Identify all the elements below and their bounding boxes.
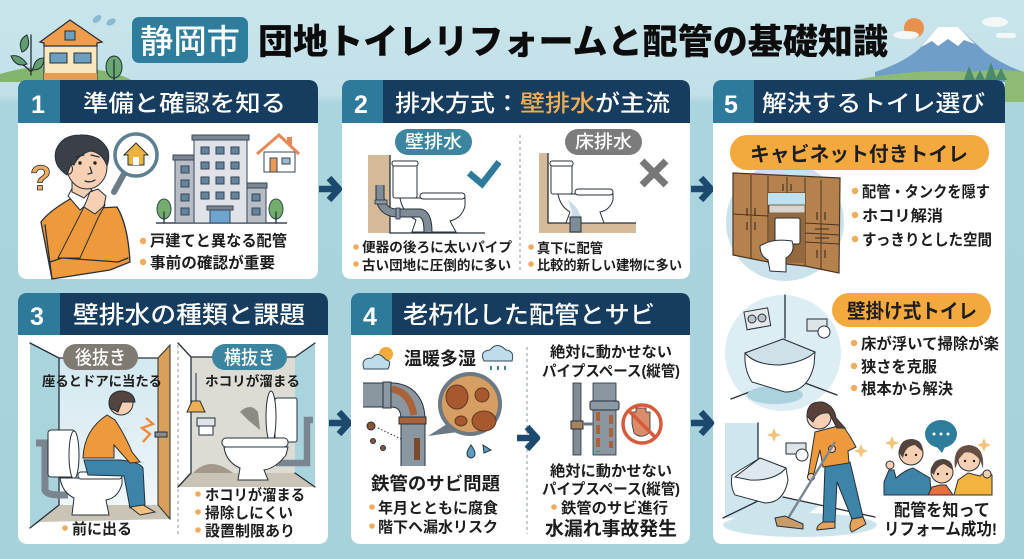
rust bullets: 年月とともに腐食	[378, 499, 498, 517]
wall-hung bullets: 根本から解決	[861, 380, 953, 398]
panel 3 number: 3	[30, 303, 44, 331]
panel 3: 壁排水の種類と課題	[18, 293, 328, 544]
label: pipe space top: 絶対に動かせない	[550, 343, 672, 361]
illustration: vertical pipes	[571, 383, 619, 455]
warning: leak accident: 水漏れ事故発生	[545, 518, 677, 540]
cabinet bullets: ホコリ解消	[862, 207, 943, 225]
panel 1 number: 1	[31, 91, 45, 119]
panel 1 bullets	[140, 231, 287, 272]
floor drain pill	[565, 129, 642, 155]
arrow 2 to 5	[691, 178, 711, 200]
panel 2: 排水方式	[342, 80, 690, 279]
illustration: Mt Fuji and sun	[855, 17, 1024, 102]
panel 2 bullets: 真下に配管	[537, 240, 603, 256]
closing message: リフォーム成功!	[884, 519, 997, 539]
label: dust collects: ホコリが溜まる	[205, 373, 300, 389]
cabinet toilet pill: キャビネット付きトイレ	[750, 143, 968, 166]
illustration: rusty pipe	[363, 382, 426, 466]
panel 1 heading: 準備と確認を知る	[83, 90, 286, 116]
bullet: rust progresses: 鉄管のサビ進行	[561, 499, 668, 517]
arrow 3 to 4	[329, 412, 349, 434]
wall-hung toilet pill	[832, 293, 991, 327]
icon: question mark: ?	[30, 159, 51, 198]
divider	[177, 345, 179, 534]
rust bullets: 階下へ漏水リスク	[378, 519, 498, 536]
pill: 横抜き: 横抜き	[224, 347, 275, 369]
illustration: happy family	[884, 420, 992, 495]
wall-hung bullets	[851, 334, 999, 398]
panel 3 bullets: ホコリが溜まる	[205, 486, 305, 504]
label: pipe space bottom: 絶対に動かせない	[550, 462, 672, 480]
icon: sun and cloud	[363, 347, 393, 369]
title badge: 静岡市: 静岡市	[140, 23, 240, 60]
illustration: cabinet toilet	[726, 163, 844, 281]
illustration: wall-hung toilet in circle	[725, 295, 841, 411]
panel 2 bullets: 古い団地に圧倒的に多い	[362, 257, 511, 273]
panel 1 bullets: 戸建てと異なる配管	[150, 231, 287, 250]
panel 4 heading: 老朽化した配管とサビ	[403, 302, 655, 329]
icon: detached house	[257, 135, 299, 172]
panel 5 heading: 解決するトイレ選び	[762, 90, 985, 116]
label: pipe space bottom: パイプスペース(縦管)	[542, 480, 680, 498]
cabinet bullets: すっきりとした空間	[862, 230, 992, 249]
divider	[519, 135, 521, 272]
divider	[526, 347, 528, 534]
closing message	[884, 500, 997, 539]
panel 2 bullets: 便器の後ろに太いパイプ	[362, 239, 513, 255]
pill: 後抜き: 後抜き	[75, 347, 126, 369]
bullet: 前に出る: 前に出る	[72, 520, 132, 538]
arrow inside panel 4	[517, 427, 537, 449]
label: warm and humid: 温暖多湿	[404, 348, 476, 369]
panel 4: 老朽化した配管とサビ	[351, 293, 690, 544]
scene: rear drain toilet and seated man	[30, 343, 170, 528]
panel 5: 解決するトイレ選び	[713, 80, 1005, 544]
pill: 後抜き	[63, 344, 138, 370]
pill: 横抜き	[212, 344, 287, 370]
panel 5 number: 5	[724, 91, 738, 119]
panel 3 bullets: 設置制限あり	[205, 523, 295, 540]
panel 2 number: 2	[354, 91, 368, 119]
illustration: apartment building	[156, 135, 287, 223]
floor drain pill: 床排水	[575, 132, 632, 152]
scene: side drain toilet	[178, 343, 315, 487]
title: 団地トイレリフォームと配管の基礎知識	[258, 23, 888, 62]
label: pipe space top: パイプスペース(縦管)	[542, 362, 680, 380]
heading: rust problem: 鉄管のサビ問題	[371, 473, 500, 494]
panel 3 bullets	[195, 486, 305, 540]
wall drain pill: 壁排水	[405, 132, 462, 152]
label: pipe space top	[542, 343, 680, 380]
illustration: wall drain toilet	[368, 155, 485, 233]
label: pipe space bottom	[542, 462, 680, 498]
illustration: rust close-up	[428, 374, 500, 458]
cabinet bullets	[852, 182, 992, 249]
icon: do not touch	[623, 405, 661, 443]
panel 3 bullets: 掃除しにくい	[205, 505, 293, 522]
label: door collision: 座るとドアに当たる	[42, 373, 162, 389]
cabinet bullets: 配管・タンクを隠す	[862, 182, 990, 201]
icon: check mark	[469, 162, 499, 184]
panel 1 bullets: 事前の確認が重要	[150, 253, 275, 272]
wall-hung toilet pill: 壁掛け式トイレ	[847, 300, 977, 323]
closing message: 配管を知って	[894, 500, 990, 520]
illustration: floor drain toilet	[539, 153, 636, 233]
panel 1: 準備と確認を知る	[18, 80, 318, 279]
illustration: thinking man	[41, 135, 130, 279]
icon: rain cloud	[482, 346, 513, 370]
arrow 1 to 2	[319, 178, 339, 200]
cabinet toilet pill	[730, 135, 989, 170]
rust bullets	[369, 499, 498, 536]
panel 2 bullets	[353, 239, 682, 273]
panel 2 heading: 排水方式： 壁排水 が主流	[395, 90, 670, 116]
title badge: 静岡市	[132, 17, 248, 63]
panel 4 number: 4	[363, 303, 377, 331]
panel 2 bullets: 比較的新しい建物に多い	[537, 257, 682, 273]
wall-hung bullets: 床が浮いて掃除が楽	[861, 334, 999, 353]
wall-hung bullets: 狭さを克服	[861, 357, 937, 376]
panel 3 heading: 壁排水の種類と課題	[73, 302, 305, 329]
illustration: woman mopping	[723, 402, 877, 537]
wall drain pill	[395, 129, 472, 155]
icon: cross mark	[642, 161, 666, 185]
arrow 4 to 5	[691, 412, 711, 434]
illustration: house on hill	[0, 13, 135, 82]
icon: magnifier with house	[114, 134, 157, 192]
